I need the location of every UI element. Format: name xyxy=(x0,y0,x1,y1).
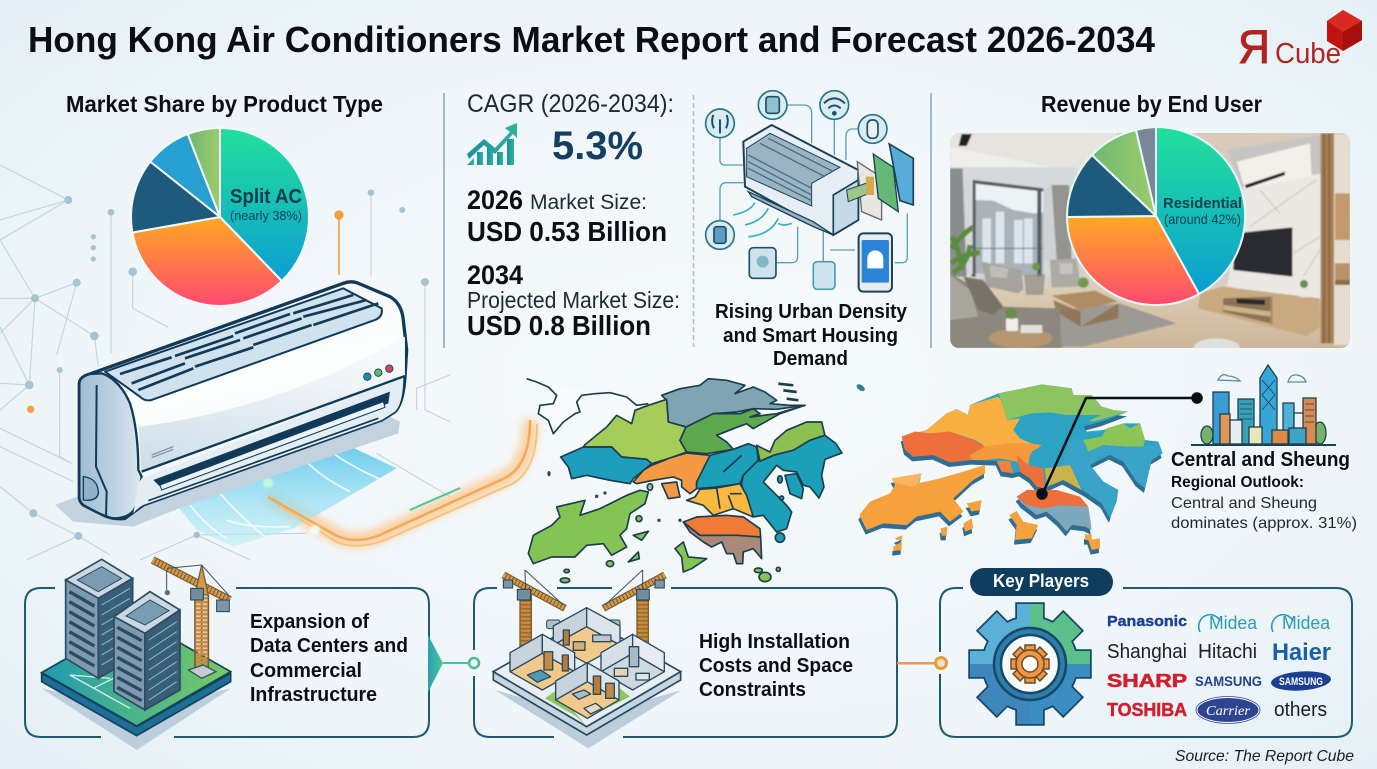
key players badge xyxy=(970,568,1113,596)
company logos grid: Shanghai xyxy=(1107,641,1187,663)
heading: market share by product type: Market Share by Product Type xyxy=(66,91,383,117)
panel: data centers xyxy=(25,559,479,750)
heading: rising urban density driver: Demand xyxy=(773,348,848,370)
left room xyxy=(510,634,575,690)
dashed divider xyxy=(692,95,694,347)
text: installation constraints: Costs and Space xyxy=(699,655,853,677)
text: data centers driver: Infrastructure xyxy=(250,684,377,706)
divider right xyxy=(930,93,932,348)
pie chart: market share by product type xyxy=(131,128,309,306)
2026 market size: Market Size: xyxy=(530,191,647,214)
divider left xyxy=(443,93,445,348)
KPI block: CAGR and market size xyxy=(467,90,680,341)
background circuit network lines xyxy=(0,165,450,560)
back room xyxy=(553,608,620,663)
2034 market size: Projected Market Size: xyxy=(467,287,680,313)
company logos grid: Carrier xyxy=(1206,704,1251,719)
company logos grid: Haier xyxy=(1272,639,1331,666)
icon: growth chart xyxy=(467,123,517,165)
company logos grid: others xyxy=(1274,699,1327,721)
pie label: split AC xyxy=(230,186,302,223)
text: data centers driver: Data Centers and xyxy=(250,635,408,657)
company logos grid: Midea xyxy=(1282,613,1331,633)
logo: Report Cube xyxy=(1238,10,1362,73)
map shadow layer xyxy=(858,389,1162,556)
heading: revenue by end user: Revenue by End User xyxy=(1041,91,1262,117)
CAGR value: 5.3% xyxy=(552,124,643,168)
arrow connector to next panel xyxy=(428,635,479,692)
2034 market size: USD 0.8 Billion xyxy=(467,310,651,341)
key players badge: Key Players xyxy=(993,571,1089,591)
2026 market size: 2026 xyxy=(467,185,523,215)
icon: gear xyxy=(966,600,1094,728)
icon: city skyline xyxy=(1191,365,1336,446)
heading: rising urban density driver: Rising Urban Density xyxy=(715,301,908,323)
pie label: residential xyxy=(1163,195,1242,227)
company logos grid: SHARP xyxy=(1107,671,1187,691)
text: regional outlook xyxy=(1171,449,1357,532)
airflow and glow ribbon xyxy=(177,420,537,547)
icon: apartment cutaway and cranes xyxy=(493,570,682,748)
pie label: split AC: Split AC xyxy=(230,186,302,208)
2026 market size: USD 0.53 Billion xyxy=(467,216,667,247)
text: regional outlook: dominates (approx. 31%) xyxy=(1171,515,1357,532)
text: regional outlook: Central and Sheung xyxy=(1171,495,1317,512)
company logos grid: Hitachi xyxy=(1198,641,1257,663)
panel: installation constraints xyxy=(474,570,946,748)
2026 market size xyxy=(467,185,667,247)
living room photo panel xyxy=(947,127,1353,358)
right room xyxy=(601,634,664,690)
logo: Report Cube: Я xyxy=(1238,20,1270,73)
2034 market size: 2034 xyxy=(467,260,523,290)
text: installation constraints: High Installation xyxy=(699,631,850,653)
text: regional outlook: Central and Sheung xyxy=(1171,449,1350,471)
arrow connector to key players xyxy=(897,658,946,668)
text: data centers driver: Expansion of xyxy=(250,611,369,633)
heading: rising urban density driver xyxy=(715,301,908,370)
company logos grid: SAMSUNG xyxy=(1195,673,1262,689)
heading: rising urban density driver: and Smart Housing xyxy=(723,325,898,347)
pie chart: revenue by end user xyxy=(1067,127,1245,305)
company logos grid: SAMSUNG xyxy=(1279,676,1323,688)
company logos grid: Panasonic xyxy=(1107,613,1187,630)
CAGR label: CAGR (2026-2034): xyxy=(467,90,674,118)
text: data centers driver xyxy=(250,611,408,706)
map: regional highlight xyxy=(855,383,1163,556)
source note: Source: The Report Cube xyxy=(1175,748,1354,765)
text: installation constraints xyxy=(699,631,853,701)
text: regional outlook: Regional Outlook: xyxy=(1171,474,1304,491)
text: data centers driver: Commercial xyxy=(250,660,362,682)
smart AC illustration xyxy=(706,91,913,292)
2034 market size xyxy=(467,260,680,341)
air conditioner unit illustration xyxy=(55,282,407,527)
company logos grid xyxy=(1107,613,1332,724)
pie label: residential: (around 42%) xyxy=(1164,211,1241,227)
pie label: residential: Residential xyxy=(1163,195,1242,212)
icon: servers and crane xyxy=(42,559,231,750)
map: Hong Kong districts xyxy=(527,379,842,583)
front room xyxy=(556,663,619,718)
leader line to Central and Sheung xyxy=(1038,394,1202,498)
logo: Report Cube: Cube xyxy=(1275,38,1341,70)
company logos grid: Midea xyxy=(1209,613,1258,633)
pie label: split AC: (nearly 38%) xyxy=(230,208,302,223)
text: installation constraints: Constraints xyxy=(699,679,806,701)
panel: key players xyxy=(940,568,1352,737)
title: Hong Kong Air Conditioners Market Report and Forecast 2026-2034 xyxy=(28,19,1155,60)
company logos grid: TOSHIBA xyxy=(1107,700,1187,720)
